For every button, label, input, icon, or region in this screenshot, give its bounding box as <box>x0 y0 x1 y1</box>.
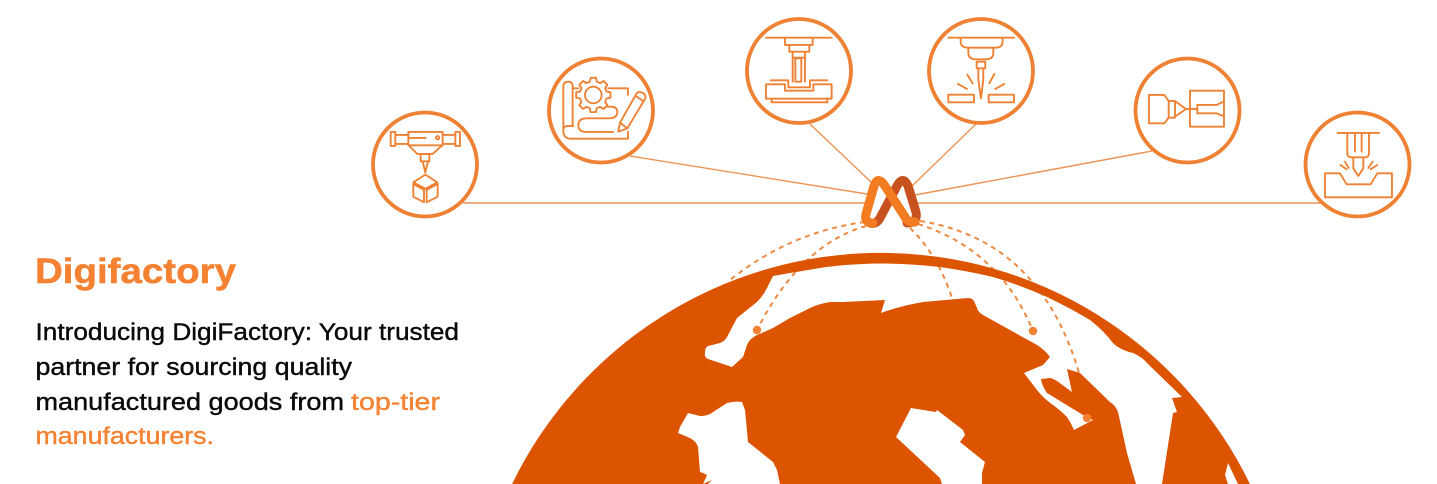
dashed routes <box>730 221 1079 373</box>
description text: manufactured goods from <box>36 389 344 416</box>
globe <box>512 253 1250 484</box>
location dot 3 <box>1083 414 1091 422</box>
heading: Digifactory <box>35 252 237 291</box>
connector lines <box>463 124 1322 203</box>
description text: manufacturers. <box>36 423 214 450</box>
icon: injection moulding <box>1136 58 1240 162</box>
icon: laser cutter <box>929 19 1033 123</box>
icon: blueprint design <box>549 58 653 162</box>
description text: top-tier <box>351 389 440 416</box>
logo <box>866 180 916 223</box>
description text <box>36 319 459 450</box>
icon: 3D printer <box>373 112 477 216</box>
icon: milling <box>1306 112 1410 216</box>
location dot 1 <box>753 326 761 334</box>
location dot 2 <box>1029 327 1037 335</box>
description text: Introducing DigiFactory: Your trusted <box>36 319 459 346</box>
icon: stamping press <box>747 19 851 123</box>
description text: partner for sourcing quality <box>36 354 353 381</box>
